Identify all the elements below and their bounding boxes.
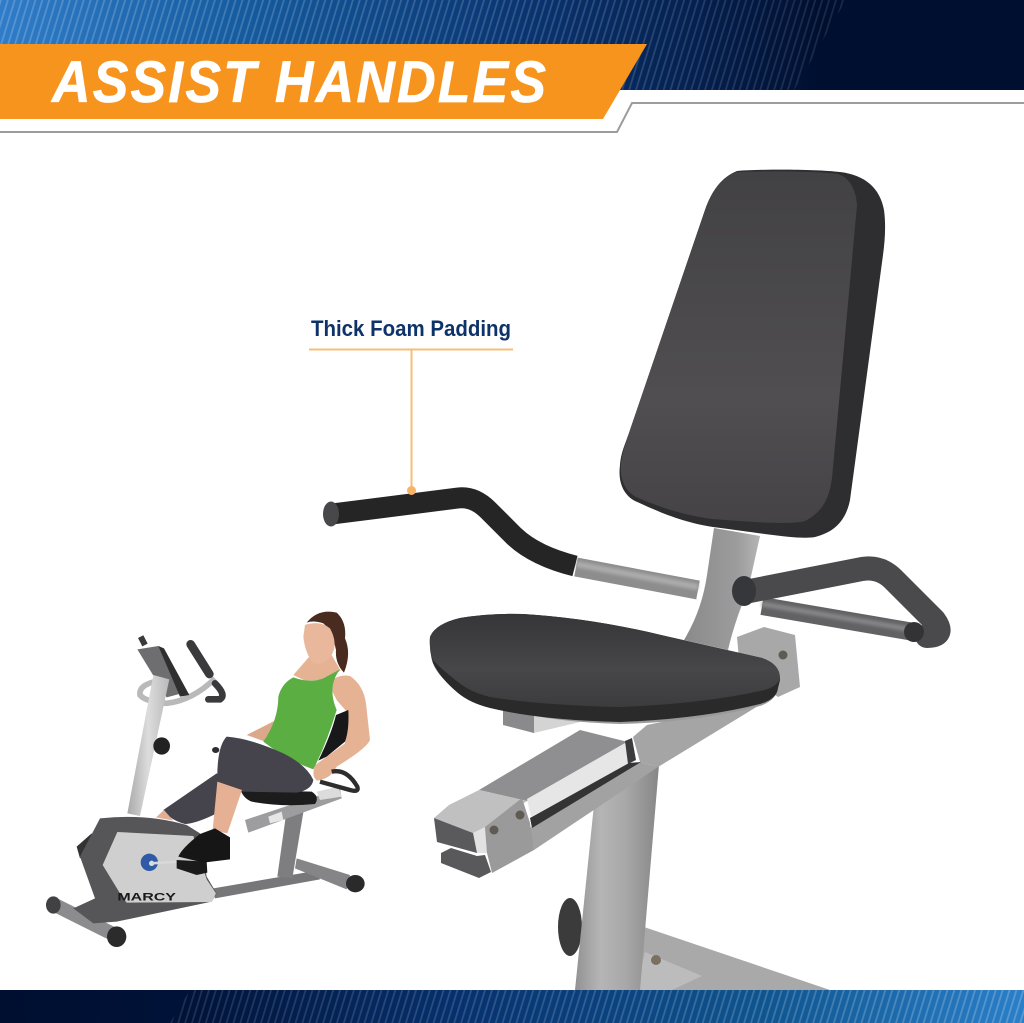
rear foot bar: [46, 896, 126, 947]
rear arm: [313, 675, 370, 781]
chair back: [318, 710, 349, 761]
white strip: [527, 743, 629, 817]
seat carriage right plate: [737, 627, 800, 697]
seat assembly photo: [323, 170, 939, 990]
right handle: [750, 568, 939, 636]
far leg: [163, 773, 243, 824]
handlebar loop: [140, 678, 215, 703]
slider end plate: [485, 798, 534, 873]
carriage bolt right: [778, 650, 788, 660]
brand: MARCY: [117, 891, 177, 903]
callout leader line: [309, 350, 513, 490]
front arm: [247, 721, 275, 742]
seat cushion small: [241, 790, 317, 805]
small bike and rider photo: [46, 612, 370, 947]
rear grip: [320, 771, 358, 791]
face: [303, 623, 335, 664]
lower slide rail: [530, 762, 658, 850]
neck and chest: [293, 655, 341, 681]
callout: thick foam padding: [309, 316, 513, 495]
mast: [127, 637, 169, 816]
flywheel housing: [73, 817, 217, 923]
backrest pad: [620, 170, 885, 538]
seat cushion: [430, 614, 780, 724]
resistance knob: [153, 737, 170, 755]
console: [137, 646, 182, 697]
base foot: [632, 927, 830, 990]
callout label: Thick Foam Padding: [311, 316, 511, 341]
thigh: [217, 737, 313, 793]
far ankle: [156, 810, 173, 821]
hair: [307, 612, 348, 673]
seat bracket: [503, 700, 580, 733]
main post: [575, 765, 659, 990]
dark slot: [530, 762, 641, 828]
left foam grip: [323, 498, 575, 566]
floor bar: [213, 858, 365, 898]
front grip: [212, 747, 219, 753]
seat post: [277, 808, 304, 878]
slider white edge: [473, 827, 487, 853]
shin: [213, 782, 242, 833]
callout dot: [407, 486, 416, 495]
dark clip: [625, 738, 636, 764]
seat rail: [633, 700, 768, 767]
upper grips: [191, 644, 222, 699]
pedal: [177, 860, 207, 875]
header banner: [0, 0, 1024, 90]
header outline: [0, 103, 1024, 132]
title: ASSIST HANDLES: [50, 50, 546, 114]
pivot knob: [732, 576, 756, 606]
slider end light face: [434, 790, 527, 853]
slider bolts: [490, 810, 524, 834]
slider end block: [434, 818, 491, 878]
left handle tube: [576, 564, 698, 590]
right handle cap: [904, 622, 924, 642]
adjustment knob: [558, 898, 582, 956]
seat slider: [245, 787, 342, 833]
title banner: [0, 44, 647, 119]
green tank top: [263, 669, 340, 769]
upper slide rail: [479, 730, 628, 801]
backrest post: [684, 528, 760, 650]
right lower tube: [762, 604, 914, 632]
footer band: [0, 990, 1024, 1023]
shoe: [178, 828, 230, 863]
